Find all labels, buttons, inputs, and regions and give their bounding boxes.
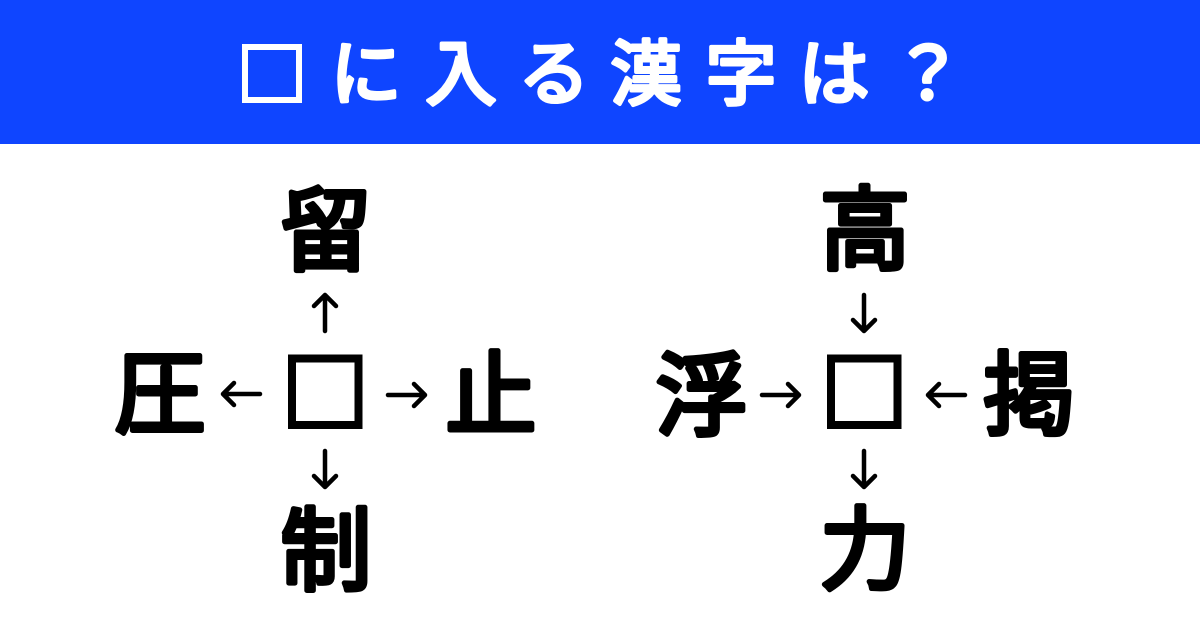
kanji right: 止 (445, 346, 537, 447)
arrow left (928, 384, 965, 406)
kanji top: 高 (819, 181, 911, 282)
kanji left: 浮 (655, 347, 747, 448)
title text: 漢 (610, 36, 682, 115)
arrow down top (853, 295, 875, 331)
kanji right: 掲 (983, 346, 1075, 447)
title text: る (518, 36, 590, 115)
arrow right (762, 384, 799, 406)
kanji bottom: 力 (819, 501, 911, 602)
center box (292, 358, 358, 425)
kanji bottom: 制 (280, 502, 372, 603)
arrow down bottom (853, 451, 875, 487)
title text: に (330, 36, 402, 115)
title box glyph (245, 47, 299, 100)
arrow left (223, 383, 260, 405)
arrow up (314, 295, 336, 331)
arrow right (388, 384, 425, 406)
center box (831, 358, 898, 425)
title banner (0, 0, 1200, 144)
puzzle left (114, 182, 537, 603)
puzzle right (655, 181, 1075, 602)
title text: ？ (892, 36, 964, 115)
arrow down (314, 451, 336, 487)
title text: 入 (425, 36, 497, 115)
title text: 字 (705, 36, 777, 115)
kanji top: 留 (280, 182, 372, 283)
title text: は (798, 36, 870, 115)
kanji left: 圧 (114, 345, 206, 446)
